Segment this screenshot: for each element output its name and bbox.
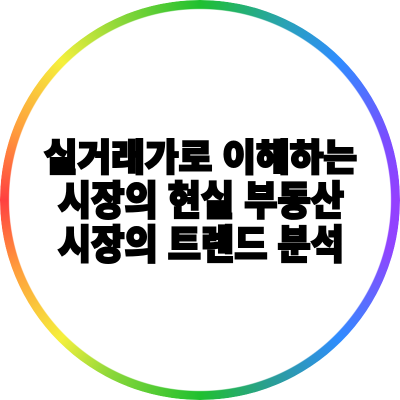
title line 2: 시장의 현실 부동산 bbox=[58, 180, 344, 224]
title line 3: 시장의 트렌드 분석 bbox=[58, 224, 344, 268]
title line 1: 실거래가로 이해하는 bbox=[44, 138, 357, 178]
